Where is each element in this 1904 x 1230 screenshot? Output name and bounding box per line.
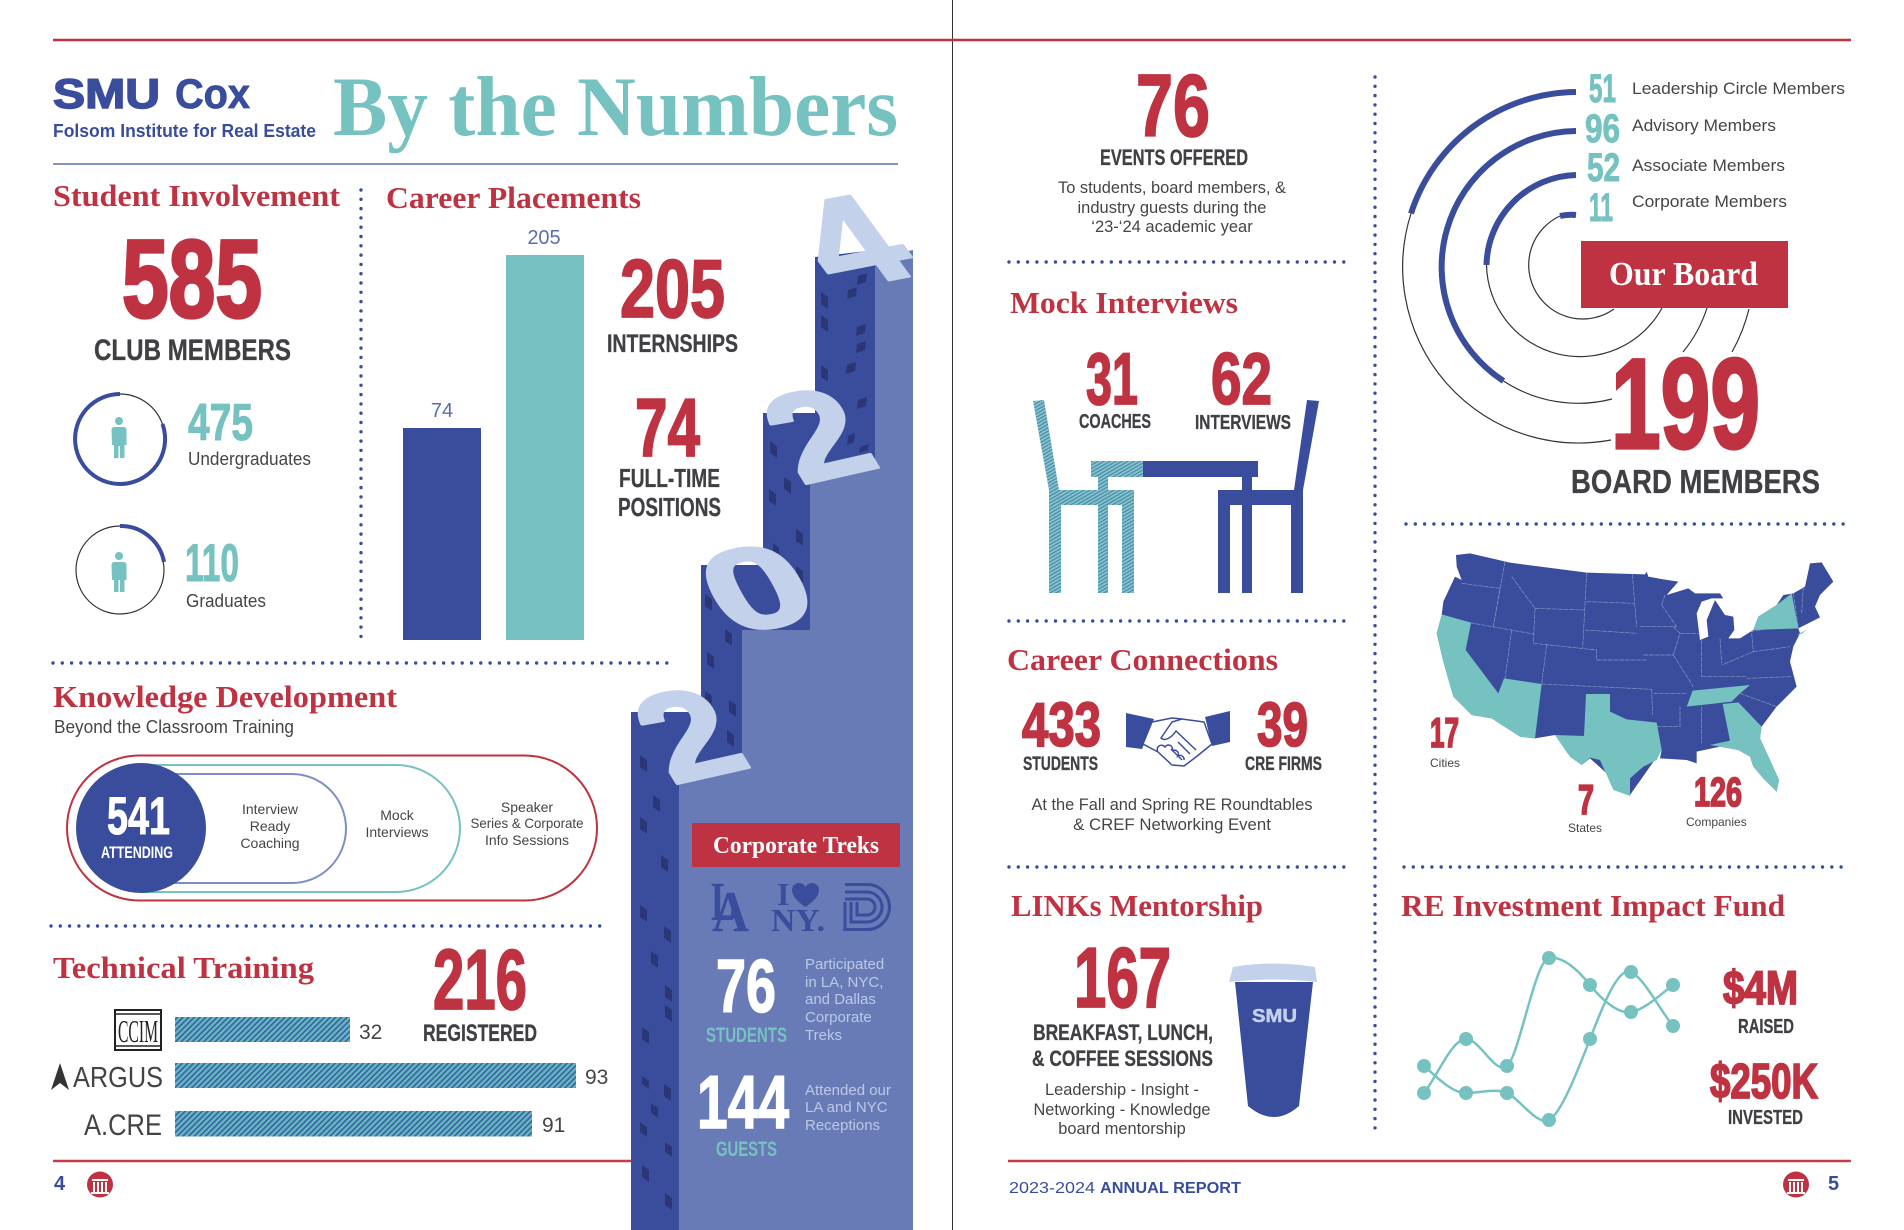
text: participated: Participated — [805, 956, 884, 973]
heading: LINKs mentorship: LINKs Mentorship — [1011, 888, 1263, 923]
digit: 2 upper: 2 — [736, 360, 900, 510]
map: United States — [1437, 553, 1833, 796]
stat: 39 CRE firms — [1245, 691, 1322, 775]
logo: SMU Cox Folsom Institute: SMU — [53, 70, 160, 117]
stat: 76 students: 76 — [716, 944, 776, 1028]
stat: 433 students: STUDENTS — [1023, 754, 1098, 775]
stat: 216 registered: REGISTERED — [423, 1020, 537, 1047]
panel: US map — [1430, 553, 1833, 835]
nested pill diagram: Coaching — [240, 835, 300, 851]
line chart — [1417, 951, 1680, 1127]
footer right: annual report and page number: ANNUAL REPORT — [1100, 1180, 1241, 1197]
stat: 126 companies — [1686, 769, 1747, 829]
stat: 205 internships: 205 — [620, 242, 725, 335]
stat: 144 guests — [697, 1060, 789, 1161]
stat: 76 events: 76 — [1136, 56, 1210, 155]
stat: 74 full-time positions — [618, 381, 721, 522]
heading: knowledge development: Knowledge Development — [53, 679, 398, 714]
title: By the Numbers — [333, 60, 898, 154]
panel: knowledge development — [53, 679, 597, 900]
text: mentorship description: Networking - Knowledge — [1034, 1101, 1210, 1119]
label: events offered: EVENTS OFFERED — [1100, 145, 1248, 170]
stat: 7 states: States — [1568, 821, 1602, 835]
member counts: Advisory Members — [1632, 116, 1776, 135]
stat: 17 cities — [1430, 709, 1460, 770]
digit: 4: 4 — [761, 168, 943, 315]
heading: student involvement: Student Involvement — [53, 178, 341, 213]
bar chart: placements — [403, 227, 584, 640]
bar chart: training registrations — [175, 1017, 608, 1137]
stat: 475 undergraduates: 475 — [188, 394, 253, 452]
text: events description: To students, board members, & — [1058, 179, 1286, 197]
member counts: Associate Members — [1632, 156, 1785, 175]
icon: handshake — [1126, 711, 1230, 766]
stat: 475 undergraduates — [188, 394, 311, 469]
nested pill diagram: Ready — [250, 818, 290, 834]
nested pill diagram: ATTENDING — [101, 843, 173, 862]
banner: our board — [1581, 241, 1788, 308]
text: attended: Receptions — [805, 1117, 880, 1134]
stat: 216 registered: 216 — [433, 933, 527, 1028]
logo: A.CRE: A.CRE — [84, 1109, 162, 1142]
stat: $250K invested: $250K — [1710, 1055, 1818, 1109]
member counts: 11 — [1589, 186, 1613, 230]
text: mentorship description: Leadership - Insight - — [1045, 1081, 1199, 1099]
text: mentorship description: board mentorship — [1058, 1120, 1186, 1138]
bar chart: training registrations: 91 — [542, 1114, 565, 1137]
member counts: Corporate Members — [1632, 192, 1787, 211]
stat: 110 graduates: Graduates — [186, 591, 266, 611]
footer right: annual report and page number: 5 — [1828, 1173, 1839, 1195]
stat: $250K invested — [1710, 1055, 1818, 1129]
stat: 74 full-time positions: POSITIONS — [618, 492, 721, 522]
nested pill diagram — [67, 756, 597, 900]
icon: coffee cup — [1229, 964, 1317, 1117]
number: 585 club members: CLUB MEMBERS — [94, 334, 291, 367]
heading: career connections: Career Connections — [1007, 642, 1278, 677]
text: roundtables: At the Fall and Spring RE Roundtables — [1032, 795, 1312, 814]
logo: ARGUS: ARGUS — [73, 1062, 163, 1094]
heading: career placements: Career Placements — [386, 180, 641, 215]
stat: 199 board members: 199 — [1611, 333, 1760, 476]
stat: 110 graduates: 110 — [185, 534, 239, 593]
bar chart: placements: 74 — [431, 400, 453, 422]
stat: 126 companies: Companies — [1686, 815, 1747, 829]
nested pill diagram: Series & Corporate — [470, 815, 584, 831]
stat: 144 guests: 144 — [697, 1060, 789, 1144]
footer right: annual report and page number: 2023-2024 — [1009, 1180, 1095, 1197]
text: participated: Treks — [805, 1027, 842, 1044]
nested pill diagram: Interview — [242, 801, 299, 817]
stat: 31 coaches: COACHES — [1079, 411, 1151, 433]
text: events description — [1058, 179, 1286, 236]
illustration: table and chairs — [1033, 400, 1319, 593]
stat: 76 students: STUDENTS — [706, 1024, 787, 1047]
chart: concentric member arcs — [1403, 92, 1749, 443]
stat: $4M raised: RAISED — [1738, 1016, 1794, 1038]
panel: student involvement — [53, 178, 341, 614]
stat: 433 students — [1022, 691, 1101, 775]
bar chart: training registrations: 93 — [585, 1066, 608, 1089]
stat: 62 interviews: 62 — [1211, 339, 1272, 420]
nested pill diagram: Mock — [380, 807, 415, 823]
stat: 39 CRE firms: 39 — [1257, 691, 1308, 760]
stat: 7 states: 7 — [1578, 776, 1594, 823]
heading: RE investment impact fund: RE Investment Impact Fund — [1401, 888, 1785, 923]
stat: 62 interviews: INTERVIEWS — [1195, 412, 1291, 434]
heading: mock interviews: Mock Interviews — [1010, 285, 1238, 320]
panel: corporate treks — [692, 823, 900, 1161]
nested pill diagram: 541 — [107, 787, 170, 846]
stat: 433 students: 433 — [1022, 691, 1101, 760]
stat: 475 undergraduates: Undergraduates — [188, 449, 311, 469]
panel: our board — [1403, 67, 1845, 500]
text: participated: and Dallas — [805, 991, 876, 1008]
stat: $4M raised: $4M — [1723, 961, 1798, 1014]
text: participated — [805, 956, 884, 1044]
panel: technical training — [51, 933, 608, 1142]
ring: graduates — [76, 526, 164, 614]
stat: 7 states — [1568, 776, 1602, 835]
logo: SMU Cox Folsom Institute — [53, 70, 316, 141]
stat: 76 students — [706, 944, 787, 1047]
number: 585 club members — [94, 218, 291, 367]
footer left: page number and icon — [54, 1172, 113, 1198]
stat: 216 registered — [423, 933, 537, 1047]
text: events description: ‘23-‘24 academic year — [1091, 218, 1253, 236]
panel: mock interviews — [1010, 285, 1319, 593]
text: participated: in LA, NYC, — [805, 974, 883, 991]
member counts — [1585, 67, 1845, 230]
member counts: 52 — [1587, 146, 1620, 190]
icon: I love NY: NY. — [771, 902, 825, 938]
heading banner: corporate treks: Corporate Treks — [713, 833, 879, 859]
stat: 17 cities: Cities — [1430, 756, 1460, 770]
panel: LINKs mentorship — [1011, 888, 1317, 1138]
stat: 17 cities: 17 — [1430, 709, 1459, 756]
text: attended — [805, 1082, 891, 1134]
stat: $250K invested: INVESTED — [1728, 1107, 1803, 1129]
panel: RE investment impact fund — [1401, 888, 1818, 1129]
nested pill diagram: Speaker — [501, 799, 553, 815]
icon: I love NY: I — [777, 876, 789, 912]
footer right: annual report and page number — [1009, 1172, 1839, 1198]
stat: 167 sessions: & COFFEE SESSIONS — [1032, 1046, 1213, 1071]
text: participated: Corporate — [805, 1009, 872, 1026]
stat: 74 full-time positions: FULL-TIME — [619, 463, 720, 493]
stat: 39 CRE firms: CRE FIRMS — [1245, 754, 1322, 775]
panel: isometric 2024 skyline — [607, 168, 943, 1230]
stat: 205 internships — [607, 242, 738, 358]
text: mentorship description — [1034, 1081, 1210, 1138]
text: roundtables — [1032, 795, 1312, 834]
member counts: 96 — [1585, 107, 1620, 151]
text: roundtables: & CREF Networking Event — [1073, 815, 1271, 834]
icon: LA logo: L — [711, 871, 735, 932]
icon: I love NY — [771, 876, 825, 938]
text: events description: industry guests during the — [1078, 199, 1266, 217]
stat: 31 coaches — [1079, 339, 1151, 433]
heading banner: corporate treks — [692, 823, 900, 867]
digit: 0: 0 — [675, 516, 839, 660]
text: attended: LA and NYC — [805, 1099, 888, 1116]
stat: 199 board members: BOARD MEMBERS — [1571, 463, 1820, 500]
stat: 167 sessions: BREAKFAST, LUNCH, — [1033, 1020, 1213, 1045]
banner: our board: Our Board — [1609, 256, 1758, 293]
nested pill diagram: Interviews — [365, 824, 429, 840]
digit: 2: 2 — [607, 660, 771, 810]
panel: career placements — [386, 180, 738, 640]
footer left: page number and icon: 4 — [54, 1173, 66, 1195]
panel: events offered — [1058, 56, 1286, 236]
logo: CCIM — [115, 1010, 161, 1050]
nested pill diagram: Info Sessions — [485, 832, 569, 848]
stat: 144 guests: GUESTS — [716, 1138, 777, 1161]
icon: Dallas D — [845, 884, 890, 930]
stat: 126 companies: 126 — [1694, 769, 1742, 815]
member counts: 51 — [1589, 67, 1616, 111]
stat: 74 full-time positions: 74 — [635, 381, 700, 474]
heading: technical training: Technical Training — [53, 950, 315, 985]
member counts: Leadership Circle Members — [1632, 79, 1845, 98]
logo: SMU Cox Folsom Institute: Folsom Institute for Real Estate — [53, 121, 316, 141]
stat: $4M raised — [1723, 961, 1798, 1038]
panel: career connections — [1007, 642, 1322, 834]
logo: CCIM: CCIM — [118, 1013, 158, 1049]
icon: coffee cup: SMU — [1252, 1006, 1297, 1026]
bar chart: placements: 205 — [527, 227, 561, 249]
subheading: Beyond the Classroom Training — [54, 717, 294, 737]
stat: 167 sessions — [1032, 931, 1213, 1071]
text: attended: Attended our — [805, 1082, 891, 1099]
number: 585 club members: 585 — [122, 218, 262, 341]
icon: LA logo: A — [712, 879, 749, 944]
stat: 31 coaches: 31 — [1086, 339, 1138, 420]
stat: 167 sessions: 167 — [1074, 931, 1171, 1026]
ring: undergraduates — [75, 394, 165, 484]
stat: 205 internships: INTERNSHIPS — [607, 330, 738, 358]
bar chart: training registrations: 32 — [359, 1021, 382, 1044]
logo: SMU Cox Folsom Institute: Cox — [175, 70, 251, 117]
